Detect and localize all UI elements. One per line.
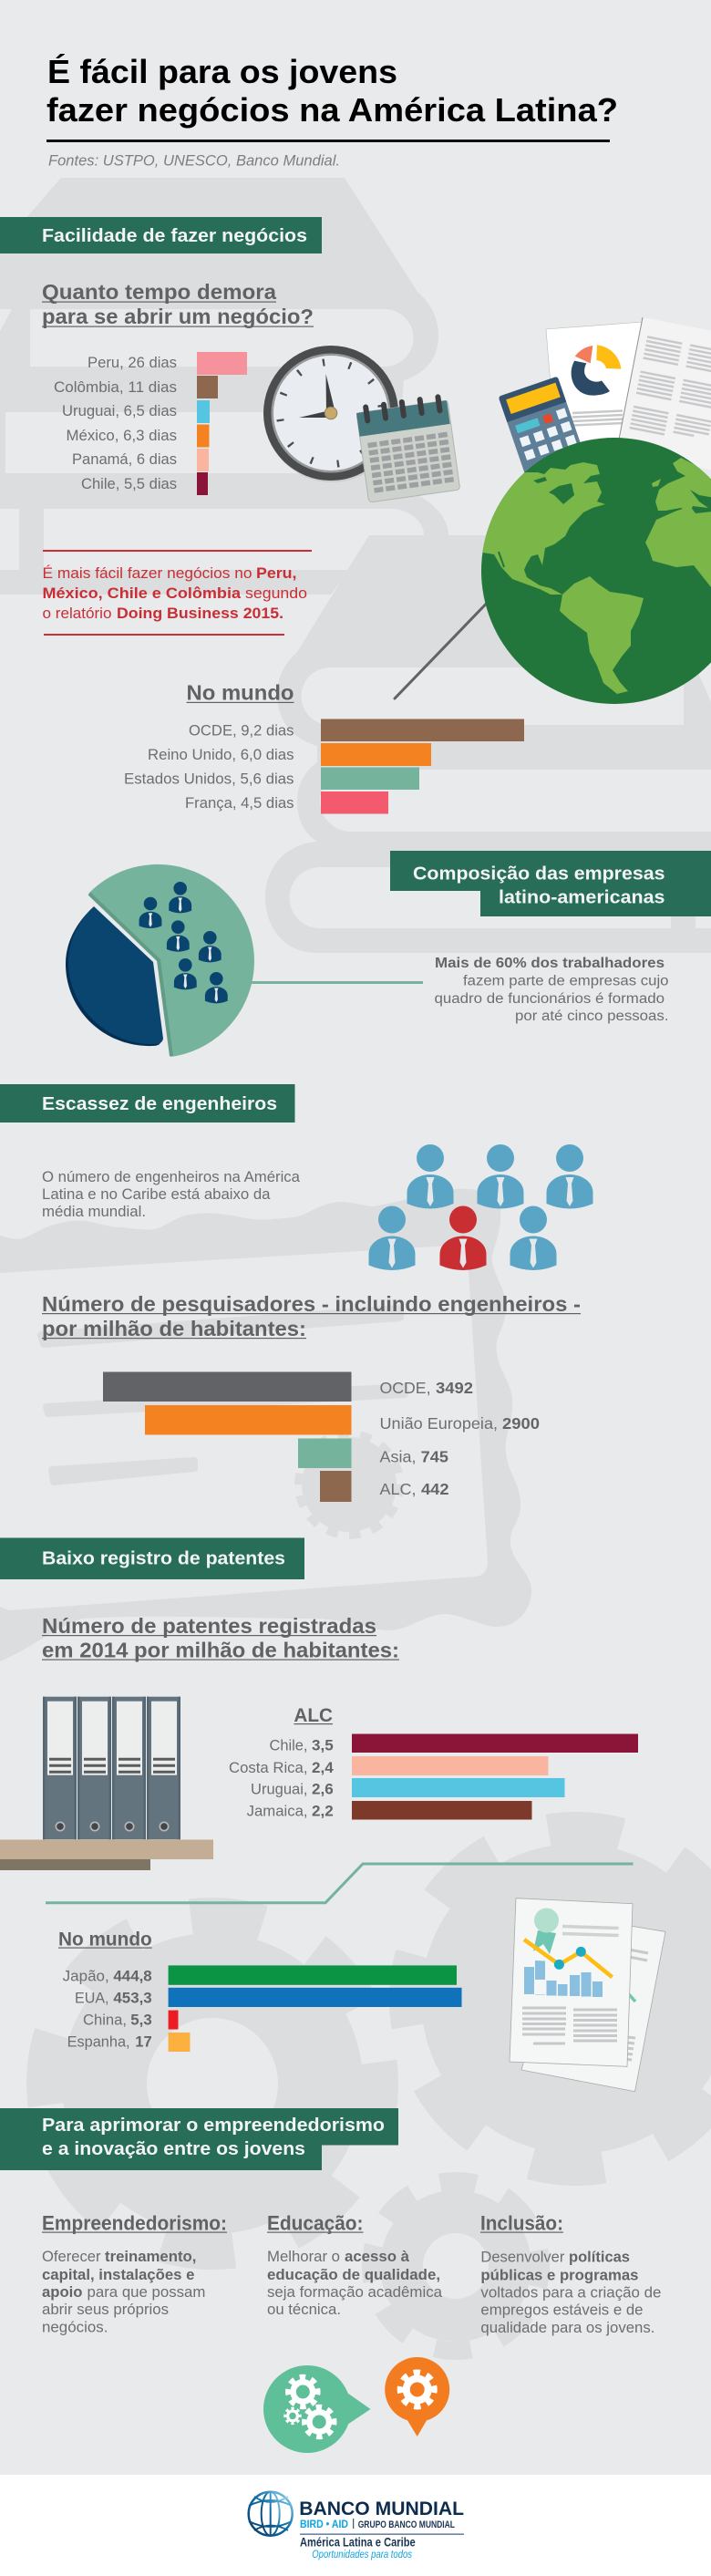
bar: Jamaica 2,2: Jamaica, — [247, 1804, 308, 1820]
icon: globe — [469, 438, 711, 704]
icon: clock — [263, 346, 399, 482]
callout: Doing Business — [42, 550, 312, 636]
bar: Jamaica 2,2: 2,2 — [312, 1804, 334, 1820]
divider line: stepped — [46, 1864, 633, 1903]
bar: OCDE 3492 — [103, 1371, 473, 1402]
bar: Asia 745: 745 — [421, 1448, 448, 1466]
background: torn paper shape — [0, 1189, 531, 1661]
background: large left gear — [31, 1902, 394, 2265]
body text: abrir seus próprios — [42, 2302, 169, 2318]
icon: group of engineers — [368, 1144, 592, 1270]
bar: OCDE: OCDE, 9,2 dias — [189, 722, 294, 739]
section header: Para aprimorar: e a inovação entre os jovens — [42, 2138, 305, 2159]
background: gear behind researchers chart — [298, 1433, 400, 1536]
column: Empreendedorismo — [42, 2211, 227, 2336]
body text: empregos estáveis e de — [480, 2302, 644, 2318]
footer — [0, 2475, 711, 2576]
icon: white report with donut chart — [546, 322, 644, 474]
bar: OCDE — [189, 719, 524, 741]
heading: researchers per million: por milhão de habitantes: — [42, 1317, 306, 1340]
heading: patents per million — [42, 1614, 399, 1661]
section header: Baixo registro de patentes: Baixo registro de patentes — [42, 1548, 285, 1568]
body text — [480, 2249, 661, 2336]
bar: Chile 3,5: 3,5 — [312, 1737, 334, 1754]
section header: Para aprimorar — [0, 2108, 398, 2170]
logo subline — [300, 2519, 455, 2530]
bar: Espanha 17: Espanha, — [67, 2033, 130, 2050]
bar: OCDE 3492: 3492 — [436, 1379, 473, 1397]
bar: EUA 453,3: 453,3 — [113, 1991, 152, 2007]
column: Inclusão — [480, 2211, 661, 2336]
bar: Chile 3,5: Chile, — [270, 1737, 308, 1754]
body text: Desenvolver — [480, 2249, 565, 2265]
callout: Doing Business: o relatório — [42, 605, 112, 622]
text: engineers below average — [42, 1169, 301, 1220]
body text: treinamento, — [105, 2249, 196, 2265]
pie slice: 60 percent — [88, 864, 254, 1057]
bar: Costa Rica 2,4: 2,4 — [312, 1760, 335, 1776]
section header: Composição das empresas: Composição das empresas — [413, 863, 665, 885]
heading: ALC: ALC — [294, 1705, 333, 1726]
bar: União Europeia 2900 — [145, 1405, 540, 1435]
callout: Doing Business: É mais fácil fazer negócios no — [42, 564, 252, 582]
logo subline: GRUPO BANCO MUNDIAL — [358, 2519, 455, 2530]
bar: ALC 442: ALC, — [379, 1480, 416, 1498]
heading: Inclusão: Inclusão: — [480, 2211, 563, 2234]
heading: No mundo (patents): No mundo — [58, 1929, 152, 1950]
background: stack of books — [0, 178, 711, 953]
bar: China 5,3: 5,3 — [130, 2012, 152, 2028]
bar: Uruguai 2,6 — [251, 1778, 565, 1798]
text: 60 percent of workers: quadro de funcionários é formado — [434, 991, 665, 1007]
bar: Espanha 17: 17 — [135, 2033, 152, 2050]
column: Educação — [267, 2211, 443, 2318]
text: engineers below average: Latina e no Caribe está abaixo da — [42, 1186, 271, 1203]
bar: China 5,3 — [83, 2011, 179, 2030]
body text: públicas e programas — [480, 2267, 638, 2283]
icon: orange pin with gear — [385, 2357, 449, 2436]
heading: patents per million: Número de patentes registradas — [42, 1614, 376, 1638]
bar: Peru: Peru, 26 dias — [88, 355, 177, 371]
bar: Uruguai 2,6: 2,6 — [312, 1782, 334, 1798]
bar: México: México, 6,3 dias — [66, 428, 177, 444]
heading: No mundo: No mundo — [186, 680, 294, 704]
text: engineers below average: O número de engenheiros na América — [42, 1169, 301, 1185]
callout: Doing Business: Doing Business 2015. — [117, 605, 283, 622]
land: South America — [560, 576, 644, 694]
heading: researchers per million — [42, 1292, 581, 1340]
section header: Facilidade de fazer negócios — [0, 217, 322, 253]
section header: Composição das empresas — [390, 851, 711, 916]
bar: EUA 453,3 — [75, 1988, 461, 2007]
bar: Japão 444,8: Japão, — [63, 1968, 109, 1984]
body text — [267, 2249, 443, 2318]
pointer line from globe — [395, 593, 497, 698]
body text: educação de qualidade, — [267, 2267, 440, 2283]
pie slice: remainder — [66, 906, 163, 1046]
text: 60 percent of workers: por até cinco pessoas. — [515, 1009, 669, 1024]
title — [46, 53, 618, 129]
bar: Jamaica 2,2 — [247, 1801, 532, 1820]
icon: green speech bubble with gears — [263, 2365, 370, 2453]
bar: Costa Rica 2,4 — [229, 1756, 549, 1776]
heading: patents per million: em 2014 por milhão de habitantes: — [42, 1638, 399, 1661]
icon: calculator — [499, 377, 590, 491]
bar: União Europeia 2900: 2900 — [502, 1414, 540, 1433]
heading: Quanto tempo demora — [42, 280, 314, 328]
bar: EUA 453,3: EUA, — [75, 1991, 109, 2007]
icon: patent documents — [510, 1898, 665, 2092]
logo globe — [249, 2492, 293, 2536]
body text: apoio — [42, 2284, 82, 2301]
bar: Panamá: Panamá, 6 dias — [72, 451, 177, 468]
logo wordmark: BANCO MUNDIAL — [299, 2498, 464, 2519]
bar: ALC 442: 442 — [421, 1480, 449, 1498]
bar: México — [66, 425, 210, 447]
back sheet — [521, 1915, 665, 2092]
logo subline: BIRD • AID — [300, 2519, 348, 2530]
section header: Escassez de engenheiros: Escassez de engenheiros — [42, 1093, 277, 1114]
body text: ou técnica. — [267, 2302, 341, 2318]
bar: Chile — [81, 472, 208, 495]
connector line: pie to text — [251, 981, 423, 984]
background: large right gear — [397, 1819, 711, 2178]
body text: acesso à — [345, 2249, 410, 2265]
text: engineers below average: média mundial. — [42, 1204, 146, 1220]
title: É fácil para os jovens — [47, 53, 397, 90]
bar: Japão 444,8 — [63, 1965, 457, 1985]
logo: Banco Mundial: América Latina e Caribe — [300, 2535, 416, 2549]
bar: ALC 442 — [320, 1471, 449, 1502]
bar: Uruguai — [62, 400, 210, 423]
body text: seja formação acadêmica — [267, 2284, 443, 2301]
bar: Reino Unido: Reino Unido, 6,0 dias — [148, 747, 294, 763]
bar chart: patents ALC — [229, 1734, 638, 1820]
bar: França — [185, 791, 388, 813]
body text: capital, instalações e — [42, 2267, 194, 2283]
background: small lower gear — [368, 2178, 543, 2354]
heading: Empreendedorismo: Empreendedorismo: — [42, 2211, 227, 2234]
logo: Banco Mundial — [249, 2492, 464, 2560]
body text: voltados para a criação de — [480, 2285, 661, 2302]
section header: Composição das empresas: latino-americanas — [499, 886, 665, 908]
land: British Isles — [652, 479, 661, 487]
bar: Uruguai: Uruguai, 6,5 dias — [62, 403, 177, 419]
bar: Colômbia — [54, 376, 218, 398]
bar chart: days worldwide — [124, 719, 524, 813]
body text: qualidade para os jovens. — [480, 2320, 654, 2336]
Hudson Bay — [549, 483, 574, 504]
bar: França: França, 4,5 dias — [185, 795, 294, 812]
callout: Doing Business: Peru, — [256, 564, 297, 582]
land: North and Central America — [469, 462, 605, 595]
bar: OCDE 3492: OCDE, — [379, 1379, 430, 1397]
heading: Quanto tempo demora: Quanto tempo demora — [42, 280, 277, 304]
title rule — [46, 140, 610, 142]
heading: Educação: Educação: — [267, 2211, 363, 2234]
section header: Para aprimorar: Para aprimorar o empreendedorismo — [42, 2115, 385, 2136]
bar: Chile: Chile, 5,5 dias — [81, 476, 177, 492]
bar: Reino Unido — [148, 743, 431, 766]
section header: Baixo registro de patentes — [0, 1537, 304, 1579]
bar: Espanha 17 — [67, 2033, 190, 2052]
bar: Colômbia: Colômbia, 11 dias — [54, 379, 177, 396]
heading: researchers per million: Número de pesquisadores - incluindo engenheiros - — [42, 1292, 581, 1316]
icon: binders on a shelf — [0, 1697, 213, 1870]
bar: Peru — [88, 352, 247, 375]
land: Africa — [645, 509, 711, 587]
bar: União Europeia 2900: União Europeia, — [379, 1414, 498, 1433]
section header: Facilidade de fazer negócios: Facilidade de fazer negócios — [42, 225, 307, 246]
callout: Doing Business: México, Chile e Colômbia — [42, 585, 242, 602]
bar: Asia 745 — [298, 1439, 448, 1468]
bar: Panamá — [72, 449, 209, 471]
body text: Oferecer — [42, 2249, 101, 2265]
bar: Estados Unidos — [124, 768, 419, 790]
title: fazer negócios na América Latina? — [46, 91, 618, 129]
body text: negócios. — [42, 2320, 108, 2336]
bar chart: patents world — [63, 1965, 461, 2052]
callout: Doing Business: segundo — [245, 585, 307, 602]
land: Europe — [655, 458, 711, 512]
bar: Uruguai 2,6: Uruguai, — [251, 1782, 308, 1798]
bar: Estados Unidos: Estados Unidos, 5,6 dias — [124, 771, 294, 788]
text: 60 percent of workers: Mais de 60% dos trabalhadores — [435, 956, 665, 971]
bar: Asia 745: Asia, — [379, 1448, 416, 1466]
logo: Banco Mundial: Oportunidades para todos — [312, 2550, 412, 2560]
sources: Fontes: USTPO, UNESCO, Banco Mundial. — [48, 151, 340, 170]
icon: grey text document — [616, 317, 711, 472]
front sheet — [510, 1898, 633, 2066]
people in pie slice — [139, 882, 228, 1003]
body text: políticas — [569, 2249, 630, 2265]
bar: China 5,3: China, — [83, 2012, 127, 2028]
section header: Escassez de engenheiros — [0, 1084, 295, 1122]
bar: Chile 3,5 — [270, 1734, 638, 1754]
bar chart: days to open a business — [54, 352, 247, 495]
text: 60 percent of workers — [434, 956, 669, 1024]
heading: Quanto tempo demora: para se abrir um negócio? — [42, 305, 314, 328]
text: 60 percent of workers: fazem parte de empresas cujo — [463, 974, 669, 988]
bar chart: researchers — [103, 1371, 540, 1502]
body text: para que possam — [88, 2284, 205, 2301]
pie chart: workers in small firms — [66, 864, 254, 1057]
body text: Melhorar o — [267, 2249, 340, 2265]
bar: Japão 444,8: 444,8 — [113, 1968, 152, 1984]
icon: calendar — [356, 396, 460, 502]
body text — [42, 2249, 205, 2336]
bar: Costa Rica 2,4: Costa Rica, — [229, 1760, 308, 1776]
